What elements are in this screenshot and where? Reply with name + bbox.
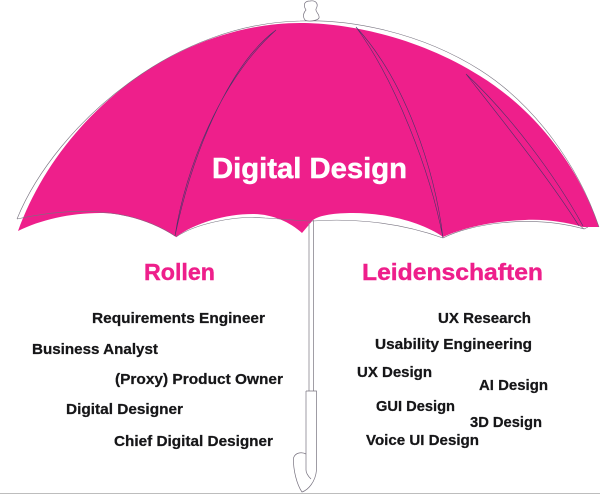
heading: Rollen: Rollen xyxy=(144,259,215,285)
handle xyxy=(293,391,316,492)
list: Rollen: Chief Digital Designer xyxy=(114,433,273,450)
shaft xyxy=(309,220,314,391)
list: Leidenschaften xyxy=(357,310,548,449)
list: Rollen: Requirements Engineer xyxy=(92,310,265,327)
list: Leidenschaften: 3D Design xyxy=(470,414,542,431)
list: Leidenschaften: GUI Design xyxy=(376,398,455,415)
list: Leidenschaften: UX Research xyxy=(438,310,531,327)
canopy ribs xyxy=(175,27,583,238)
list: Leidenschaften: UX Design xyxy=(357,364,432,381)
title: Digital Design xyxy=(212,153,407,185)
canopy xyxy=(18,23,599,237)
list: Rollen xyxy=(32,310,283,450)
canopy outline xyxy=(17,21,599,238)
list: Leidenschaften: Voice UI Design xyxy=(366,432,479,449)
top knob xyxy=(303,1,319,21)
list: Rollen: Business Analyst xyxy=(32,341,158,358)
list: Rollen: Digital Designer xyxy=(66,401,183,418)
list: Leidenschaften: AI Design xyxy=(479,377,548,394)
list: Leidenschaften: Usability Engineering xyxy=(375,336,532,353)
list: Rollen: (Proxy) Product Owner xyxy=(115,371,283,388)
heading: Leidenschaften: Leidenschaften xyxy=(362,259,543,285)
